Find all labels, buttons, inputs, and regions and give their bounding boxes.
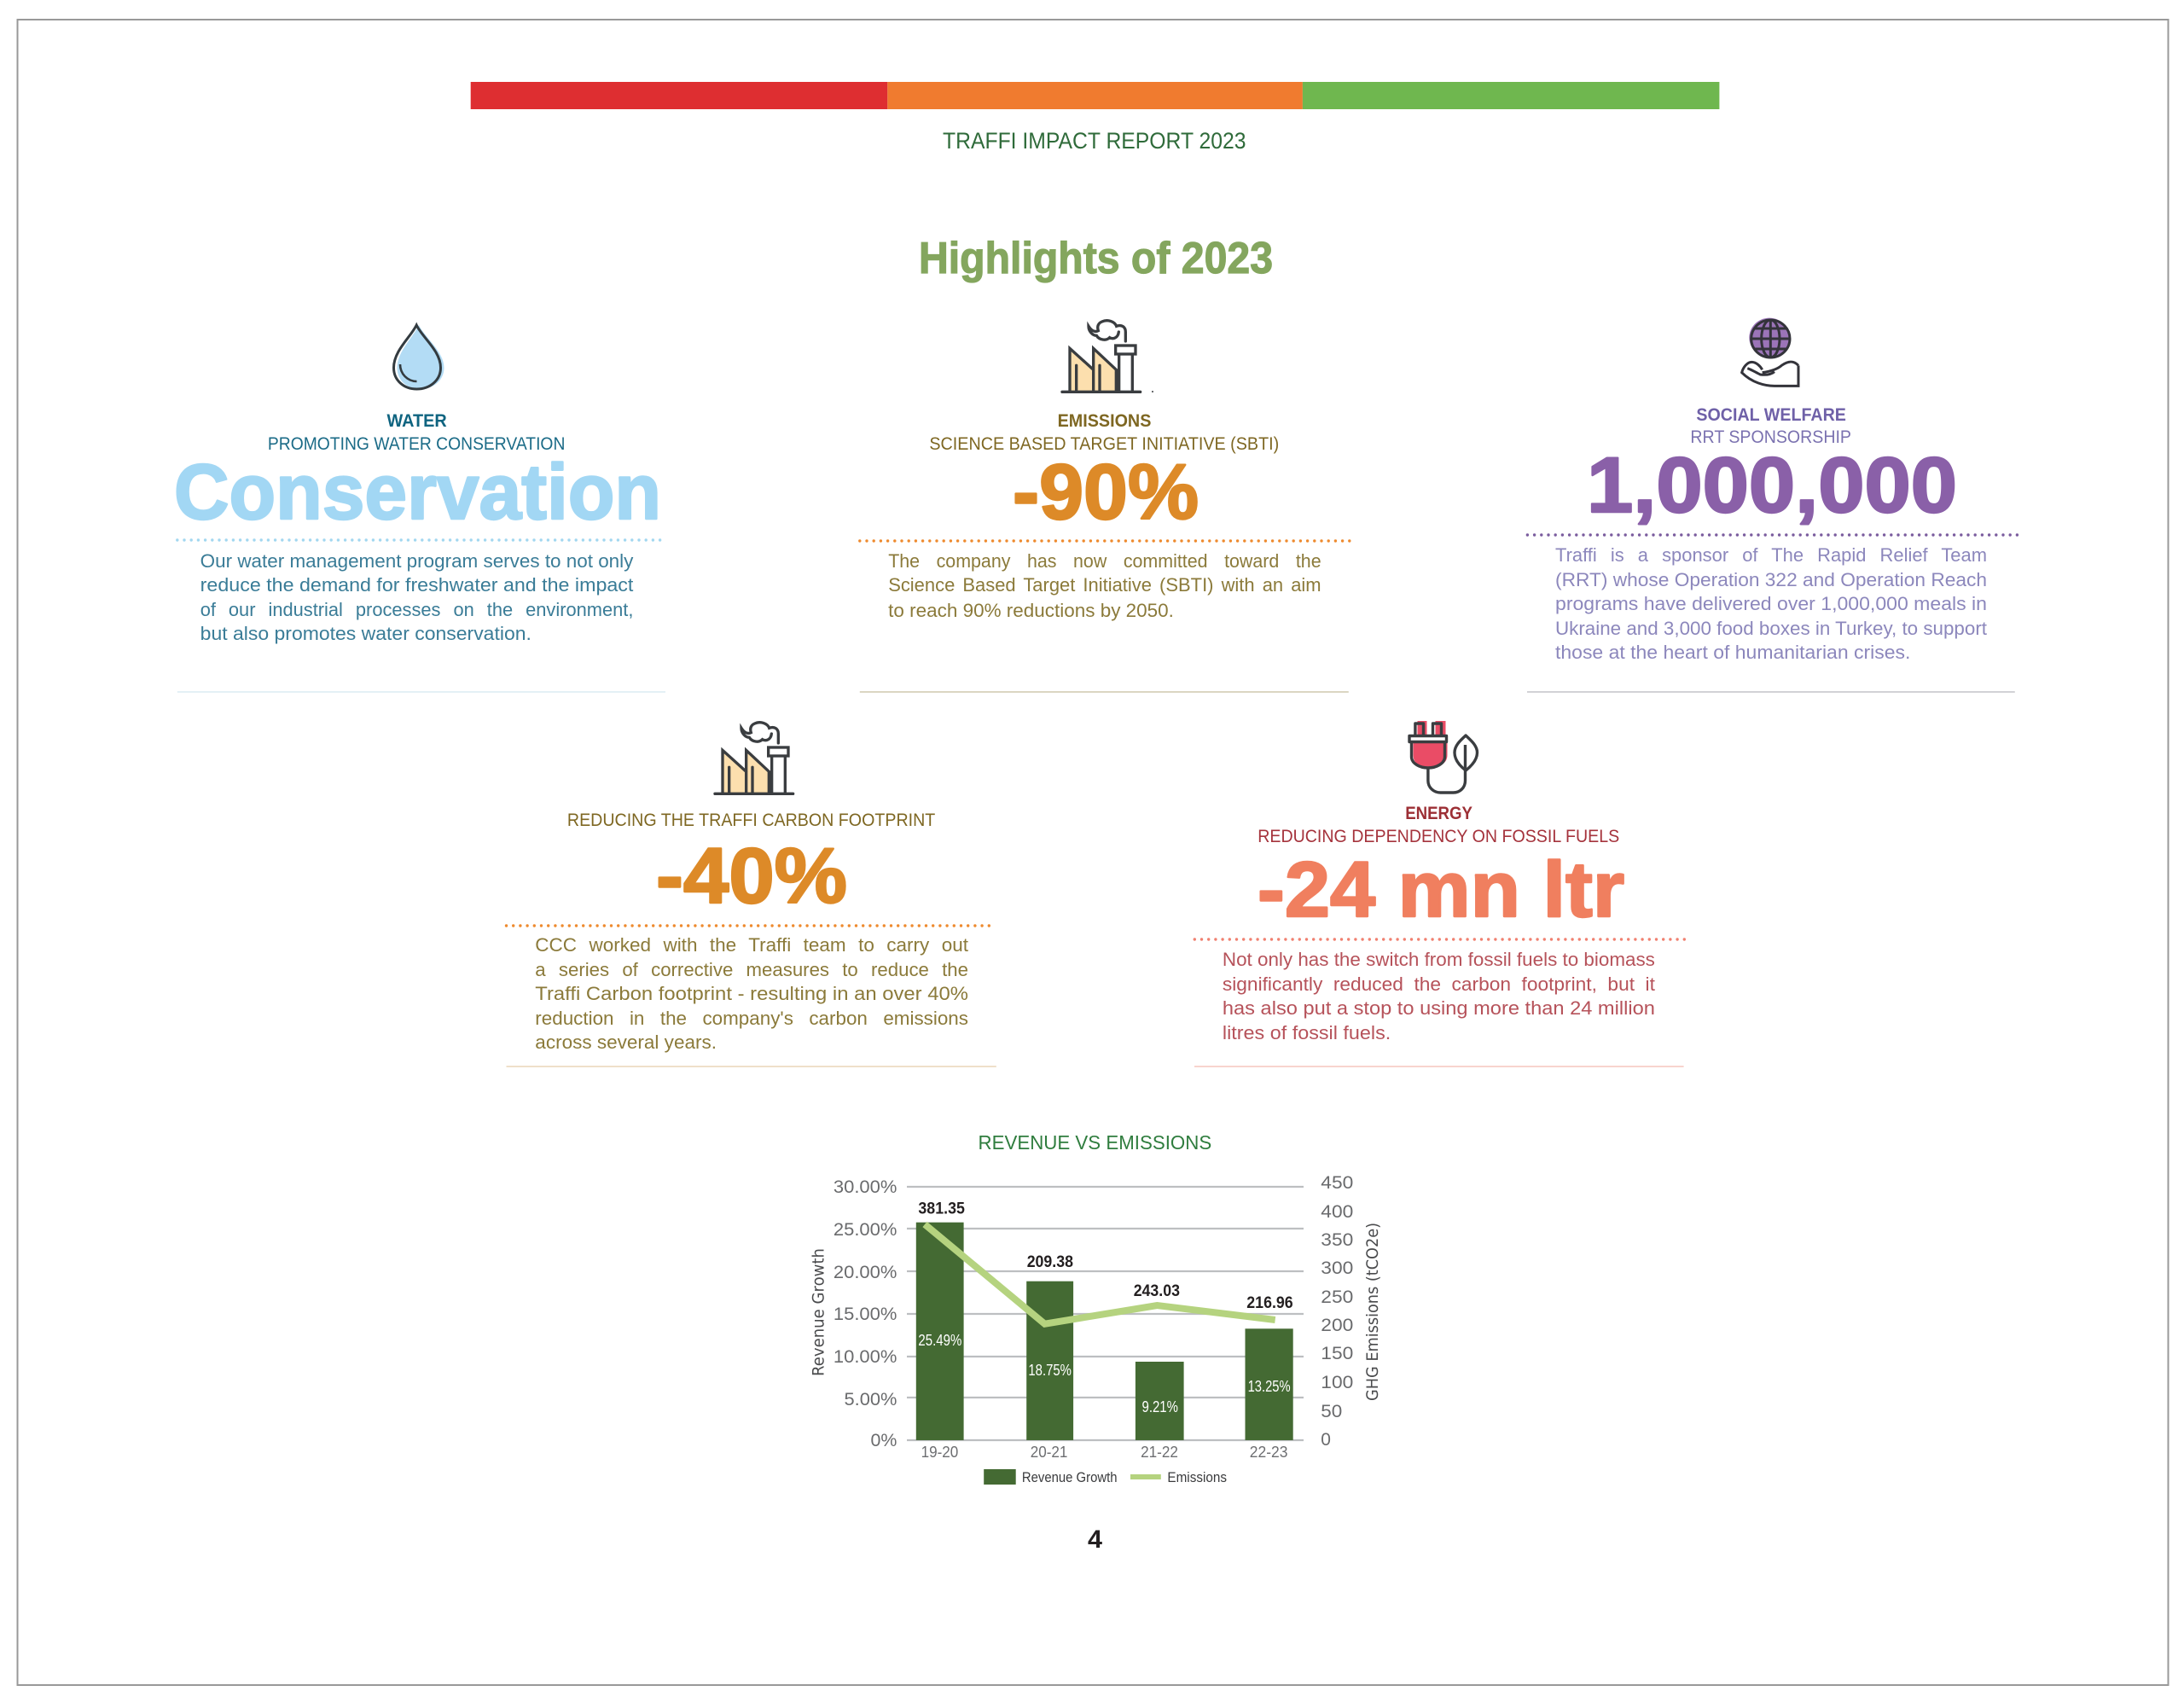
- icon: water drop: [394, 325, 444, 389]
- left axis labels: 0%: [870, 1431, 897, 1450]
- big stat: -40%: [656, 833, 847, 920]
- left axis title: Revenue Growth: [809, 1248, 828, 1376]
- x axis labels: 19-20: [921, 1444, 958, 1461]
- description: a series of corrective measures to reduce the: [535, 959, 968, 980]
- x axis labels: 22-23: [1250, 1444, 1288, 1461]
- subheading: SCIENCE BASED TARGET INITIATIVE (SBTI): [929, 434, 1279, 454]
- description: CCC worked with the Traffi team to carry out: [535, 934, 968, 956]
- header colour bar: [471, 82, 1719, 109]
- description: [535, 934, 968, 1053]
- icon: plug and leaf: [1409, 721, 1478, 793]
- subheading: REDUCING THE TRAFFI CARBON FOOTPRINT: [567, 811, 935, 830]
- subheading: PROMOTING WATER CONSERVATION: [268, 434, 565, 454]
- x axis labels: 21-22: [1141, 1444, 1178, 1461]
- legend: Emissions: [1167, 1469, 1227, 1485]
- left axis labels: 10.00%: [834, 1347, 897, 1367]
- description: Our water management program serves to not only: [200, 550, 633, 572]
- description: of our industrial processes on the environment,: [200, 599, 633, 620]
- revenue values: 9.21%: [1141, 1398, 1178, 1415]
- description: Ukraine and 3,000 food boxes in Turkey, to support: [1555, 618, 1987, 639]
- revenue values: [918, 1332, 1291, 1415]
- left axis labels: 15.00%: [834, 1305, 897, 1324]
- description: [1555, 544, 1987, 663]
- revenue values: 25.49%: [918, 1332, 961, 1349]
- x axis labels: 20-21: [1031, 1444, 1067, 1461]
- left axis labels: 5.00%: [845, 1390, 897, 1409]
- description: (RRT) whose Operation 322 and Operation Reach: [1555, 569, 1987, 590]
- description: across several years.: [535, 1032, 717, 1053]
- description: The company has now committed toward the: [888, 550, 1321, 572]
- description: has also put a stop to using more than 24 million: [1223, 997, 1655, 1019]
- chart title: REVENUE VS EMISSIONS: [978, 1131, 1211, 1154]
- category label: EMISSIONS: [1058, 411, 1151, 431]
- emissions values: 243.03: [1134, 1282, 1180, 1300]
- description: those at the heart of humanitarian crises.: [1555, 642, 1910, 663]
- icon: factory: [715, 723, 793, 793]
- right axis labels: 450: [1321, 1173, 1353, 1193]
- emissions values: 216.96: [1246, 1294, 1293, 1312]
- right axis labels: 350: [1321, 1230, 1353, 1250]
- description: Traffi Carbon footprint - resulting in an over 40%: [535, 983, 968, 1004]
- right axis labels: 300: [1321, 1258, 1353, 1278]
- panel: social welfare: [1527, 318, 2018, 692]
- right axis labels: 250: [1321, 1287, 1353, 1307]
- legend: Revenue Growth: [1022, 1469, 1118, 1485]
- emissions values: 381.35: [918, 1200, 965, 1218]
- right axis labels: 150: [1321, 1344, 1353, 1363]
- right axis labels: 50: [1321, 1402, 1342, 1421]
- right axis labels: 200: [1321, 1316, 1353, 1335]
- category label: WATER: [387, 411, 447, 431]
- description: litres of fossil fuels.: [1223, 1022, 1391, 1043]
- emissions values: [918, 1200, 1293, 1312]
- panel: carbon footprint: [507, 723, 996, 1066]
- right axis labels: [1321, 1173, 1353, 1450]
- chart: revenue vs emissions: [809, 1131, 1382, 1485]
- subheading: RRT SPONSORSHIP: [1690, 427, 1851, 447]
- category label: ENERGY: [1405, 804, 1472, 823]
- description: reduction in the company's carbon emissions: [535, 1008, 968, 1029]
- icon: factory: [1062, 321, 1153, 392]
- big stat: -90%: [1013, 449, 1199, 536]
- description: to reach 90% reductions by 2050.: [888, 600, 1174, 621]
- description: significantly reduced the carbon footprint, but it: [1223, 973, 1655, 995]
- page number: 4: [1088, 1526, 1102, 1554]
- description: programs have delivered over 1,000,000 meals in: [1555, 593, 1987, 614]
- left axis labels: 20.00%: [834, 1263, 897, 1282]
- revenue values: 18.75%: [1028, 1362, 1072, 1379]
- category label: SOCIAL WELFARE: [1696, 405, 1846, 425]
- description: Traffi is a sponsor of The Rapid Relief Team: [1555, 544, 1987, 566]
- report title: TRAFFI IMPACT REPORT 2023: [943, 128, 1246, 154]
- left axis labels: [834, 1177, 897, 1450]
- big stat: Conservation: [174, 449, 661, 536]
- icon: globe in hand: [1742, 318, 1798, 386]
- right axis labels: 100: [1321, 1373, 1353, 1392]
- description: [888, 550, 1321, 621]
- heading: Highlights of 2023: [919, 234, 1273, 283]
- right axis labels: 0: [1321, 1430, 1331, 1450]
- description: Not only has the switch from fossil fuels to biomass: [1223, 949, 1655, 970]
- big stat: 1,000,000: [1587, 442, 1957, 529]
- description: but also promotes water conservation.: [200, 623, 531, 644]
- subheading: REDUCING DEPENDENCY ON FOSSIL FUELS: [1258, 827, 1619, 846]
- description: [1223, 949, 1655, 1043]
- legend: [984, 1469, 1227, 1485]
- revenue growth bars: [916, 1223, 1293, 1440]
- big stat: -24 mn ltr: [1258, 846, 1624, 933]
- emissions values: 209.38: [1027, 1253, 1073, 1271]
- panel: water: [174, 325, 665, 692]
- right axis labels: 400: [1321, 1202, 1353, 1222]
- description: Science Based Target Initiative (SBTI) with an aim: [888, 574, 1321, 596]
- revenue values: 13.25%: [1248, 1378, 1291, 1395]
- left axis labels: 25.00%: [834, 1220, 897, 1240]
- emissions line: [925, 1224, 1275, 1324]
- x axis labels: [921, 1444, 1288, 1461]
- right axis title: GHG Emissions (tCO2e): [1363, 1223, 1382, 1401]
- description: reduce the demand for freshwater and the impact: [200, 574, 633, 596]
- panel: energy: [1194, 721, 1687, 1066]
- panel: emissions: [860, 321, 1352, 692]
- left axis labels: 30.00%: [834, 1177, 897, 1197]
- description: [200, 550, 633, 644]
